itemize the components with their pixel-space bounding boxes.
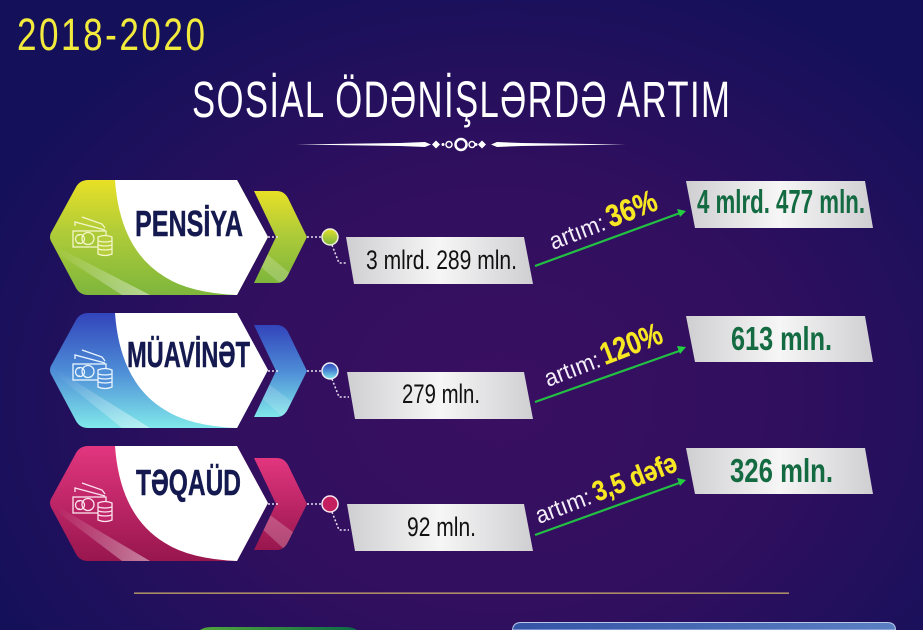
bottom blue panel [512, 622, 896, 630]
box: 2020 value [686, 316, 873, 362]
growth label [538, 316, 667, 394]
box: 2020 value: 613 mln. [731, 320, 832, 357]
connector [268, 237, 347, 263]
chevron [254, 325, 307, 419]
label text: TƏQAÜD [136, 462, 241, 503]
icon: money [73, 217, 112, 256]
hexagon label: teqaud [50, 446, 268, 561]
title: SOSİAL ÖDƏNİŞLƏRDƏ ARTIM [192, 71, 730, 129]
hexagon label: pensiya [50, 180, 268, 295]
growth label: artım: [545, 210, 609, 256]
box: 2018 value [346, 237, 533, 284]
arrow [535, 209, 686, 266]
hexagon label: muavinet [50, 313, 268, 428]
box: 2020 value [686, 181, 873, 228]
growth label: 3,5 dəfə [588, 447, 681, 507]
icon: money [73, 350, 112, 388]
node dot [322, 363, 338, 379]
arrow [535, 346, 686, 402]
icon: money [73, 483, 112, 522]
growth label [543, 183, 662, 257]
chevron [254, 458, 307, 550]
node dot [322, 229, 338, 245]
row: pensiya [50, 180, 873, 295]
arrow [535, 478, 686, 535]
box: 2018 value: 279 mln. [402, 379, 480, 409]
growth label: 36% [601, 183, 662, 234]
box: 2020 value [686, 448, 873, 494]
connector [268, 504, 349, 530]
label text: MÜAVİNƏT [127, 334, 250, 375]
connector [268, 371, 349, 397]
growth label: artım: [531, 484, 595, 530]
box: 2018 value: 92 mln. [407, 512, 476, 542]
growth label: 120% [595, 316, 667, 372]
box: 2018 value: 3 mlrd. 289 mln. [366, 245, 517, 275]
growth label: artım: [540, 347, 604, 393]
title ornament [296, 139, 626, 150]
chevron [254, 191, 307, 285]
row: teqaud [50, 446, 873, 561]
row: muavinet [50, 313, 873, 428]
node dot [322, 496, 338, 512]
growth label [530, 447, 681, 530]
box: 2020 value: 326 mln. [730, 452, 833, 489]
label text: PENSİYA [135, 203, 243, 244]
box: 2018 value [347, 504, 533, 551]
bottom green pill [200, 627, 357, 630]
date range heading: 2018-2020 [17, 9, 205, 60]
box: 2018 value [347, 372, 533, 419]
